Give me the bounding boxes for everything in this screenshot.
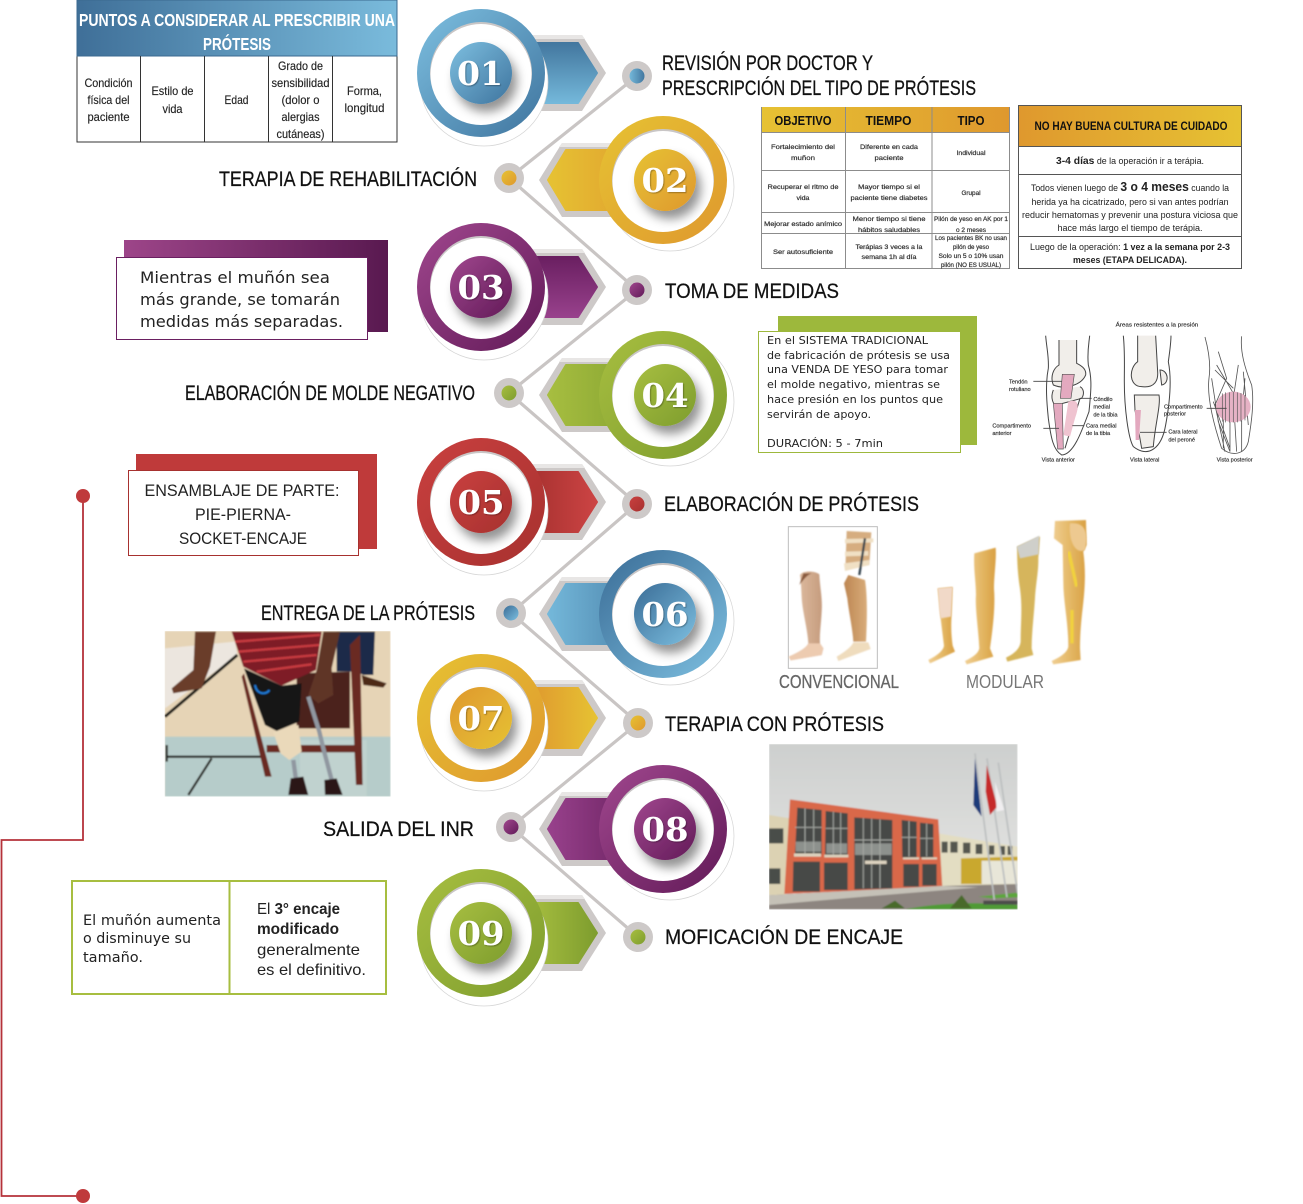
- panel: therapy table: Mayor tiempo si el: [858, 184, 921, 191]
- panel: therapy table: muñon: [791, 155, 815, 162]
- step 08: purple badge: 08: [642, 810, 688, 849]
- right note: El 3° encaje: [257, 901, 340, 918]
- table body: alergias: [282, 110, 320, 124]
- diagram: pressure-tolerant areas of the stump: Cara lateral: [1168, 430, 1198, 436]
- panel: considerations table: [77, 0, 397, 142]
- modular prosthesis 4 socket: [1070, 523, 1086, 551]
- zigzag connector line: [509, 76, 638, 937]
- left note: tamaño.: [83, 950, 143, 966]
- callout: step 04 plaster: de fabricación de prótesis se usa: [767, 349, 950, 362]
- panel: therapy table: pilón de yeso: [953, 244, 989, 251]
- step 03: purple badge: 03: [458, 268, 504, 307]
- heading: salida del inr: SALIDA DEL INR: [323, 818, 474, 841]
- step 07: yellow badge: [417, 654, 606, 791]
- diagram: pressure-tolerant areas of the stump: Compartimento: [1164, 404, 1203, 410]
- panel: therapy table: Diferente en cada: [860, 144, 918, 151]
- step 07: yellow badge: 07: [458, 699, 504, 738]
- table body: Estilo de: [152, 84, 194, 98]
- callout: step 05 assembly: ENSAMBLAJE DE PARTE:: [144, 481, 340, 500]
- table header: PRÓTESIS: [203, 33, 271, 54]
- callout: step 04 plaster: el molde negativo, mientras se: [767, 378, 940, 391]
- diagram: pressure-tolerant areas of the stump: medial: [1093, 404, 1110, 410]
- panel: therapy table: Fortalecimiento del: [771, 144, 836, 151]
- care box header: [1018, 105, 1242, 146]
- callout: step 05 assembly: PIE-PIERNA-: [195, 505, 291, 524]
- panel: therapy table: paciente: [874, 155, 904, 162]
- table body: cutáneas): [276, 127, 324, 141]
- right note: [257, 901, 366, 979]
- anterior view: [1046, 336, 1091, 455]
- lateral view: [1123, 336, 1171, 452]
- right note: modificado: [257, 921, 339, 938]
- heading: revisión por doctor: REVISIÓN POR DOCTOR Y: [662, 52, 873, 75]
- modular prosthesis 4: [1052, 520, 1087, 664]
- callout: step 04 plaster: hace presión en los puntos que: [767, 393, 943, 406]
- table header: [77, 0, 397, 56]
- therapy table header: TIPO: [958, 113, 984, 128]
- heading: revisión por doctor: PRESCRIPCIÓN DEL TIPO DE PRÓTESIS: [662, 77, 976, 100]
- left note: El muñón aumenta: [83, 913, 221, 929]
- panel: care culture box: meses (ETAPA DELICADA).: [1073, 255, 1187, 265]
- therapy table header: TIEMPO: [866, 113, 912, 128]
- step 01: blue badge: 01: [457, 54, 503, 93]
- callout: step 04 plaster: DURACIÓN: 5 - 7min: [767, 437, 883, 450]
- callout: step 03 measures: [116, 240, 388, 340]
- heading: elaboración de prótesis: ELABORACIÓN DE PRÓTESIS: [664, 493, 919, 516]
- heading: elaboración de molde negativo: ELABORACIÓN DE MOLDE NEGATIVO: [185, 382, 475, 405]
- panel: therapy table: Menor tiempo si tiene: [852, 216, 926, 223]
- panel: therapy table: paciente tiene diabetes: [850, 195, 928, 202]
- table body: Grado de: [278, 59, 323, 73]
- panel: care culture box: Todos vienen luego de 3 o 4 meses cuando la: [1031, 180, 1229, 194]
- callout: step 05 assembly: SOCKET-ENCAJE: [179, 529, 307, 548]
- heading: modificación de encaje: MOFICACIÓN DE ENCAJE: [665, 926, 903, 949]
- diagram: pressure-tolerant areas of the stump: Tendón: [1009, 379, 1028, 385]
- step 05: red badge: [417, 438, 606, 575]
- modular prosthesis 2: [965, 548, 996, 664]
- table header: PUNTOS A CONSIDERAR AL PRESCRIBIR UNA: [79, 10, 395, 30]
- callout: step 04 plaster: una VENDA DE YESO para tomar: [767, 363, 948, 376]
- panel: therapy table: Pilón de yeso en AK por 1: [934, 216, 1008, 223]
- care box header: NO HAY BUENA CULTURA DE CUIDADO: [1034, 119, 1228, 133]
- callout: step 04 plaster: servirán de apoyo.: [767, 408, 871, 421]
- connector nodes: [494, 61, 653, 952]
- callout: step 03 measures: medidas más separadas.: [140, 312, 343, 331]
- heading: toma de medidas: TOMA DE MEDIDAS: [665, 280, 839, 303]
- table body: longitud: [344, 101, 384, 115]
- table body: (dolor o: [282, 93, 320, 107]
- diagram: pressure-tolerant areas of the stump: posterior: [1164, 412, 1186, 418]
- heading: entrega de la prótesis: ENTREGA DE LA PRÓTESIS: [261, 602, 475, 625]
- label: modular: MODULAR: [966, 672, 1044, 692]
- panel: care culture box: hace más largo el tiempo de terápia.: [1058, 223, 1202, 233]
- panel: care culture box: herida ya ha cicatrizado, pero si van antes podrían: [1032, 197, 1228, 207]
- step 09: green badge: [417, 869, 606, 1006]
- posterior view: [1205, 336, 1253, 453]
- panel: therapy table: [761, 107, 1010, 269]
- panel: therapy table: o 2 meses: [956, 227, 987, 234]
- panel: care culture box: Luego de la operación: 1 vez a la semana por 2-3: [1030, 242, 1230, 252]
- diagram: pressure-tolerant areas of the stump: de la tibia: [1093, 412, 1118, 418]
- diagram: pressure-tolerant areas of the stump: del peroné: [1168, 438, 1195, 444]
- panel: therapy table: semana 1h al día: [862, 254, 917, 261]
- modular prosthesis 1 socket: [938, 587, 953, 618]
- diagram: pressure-tolerant areas of the stump: Vista lateral: [1130, 458, 1159, 464]
- diagram: pressure-tolerant areas of the stump: rotuliano: [1009, 387, 1031, 393]
- step 06: blue badge: 06: [642, 595, 688, 634]
- panel: therapy table: Solo un 5 o 10% usan: [938, 253, 1004, 260]
- panel: therapy table: vida: [796, 195, 810, 202]
- diagram: pressure-tolerant areas of the stump: de la tibia: [1086, 431, 1111, 437]
- callout: step 04 plaster: [758, 316, 977, 452]
- panel: therapy table: Ser autosuficiente: [773, 249, 833, 256]
- table body: sensibilidad: [272, 76, 330, 90]
- panel: therapy table: Mejorar estado anímico: [764, 221, 842, 228]
- anatomy leader lines: [1033, 381, 1227, 432]
- figure: conventional and modular prostheses: [788, 520, 1087, 668]
- modular prosthesis 3: [1006, 537, 1040, 662]
- table body: [77, 0, 397, 142]
- step 05: red badge: 05: [458, 483, 504, 522]
- diagram: pressure-tolerant areas of the stump: anterior: [992, 431, 1012, 437]
- callout: step 05 assembly: [128, 454, 377, 556]
- modular prosthesis 4 pylon: [1069, 552, 1077, 643]
- callout: step 04 plaster: En el SISTEMA TRADICIONAL: [767, 334, 929, 347]
- decorative red timeline connector: [2, 489, 90, 1203]
- callout: step 03 measures: Mientras el muñón sea: [140, 268, 330, 287]
- conventional prosthesis illustration: [788, 527, 877, 668]
- step 03: purple badge: [417, 223, 606, 360]
- step 08: purple badge: [539, 765, 734, 900]
- therapy table header: [761, 107, 1010, 132]
- step 02: orange badge: [539, 116, 734, 251]
- panel: care culture box: [1018, 105, 1242, 269]
- heading: terapia con prótesis: TERAPIA CON PRÓTESIS: [665, 713, 884, 736]
- diagram: pressure-tolerant areas of the stump: Vista posterior: [1217, 458, 1253, 464]
- table body: Edad: [224, 93, 248, 107]
- panel: therapy table: Individual: [956, 150, 986, 157]
- heading: terapia de rehabilitación: TERAPIA DE REHABILITACIÓN: [219, 168, 477, 191]
- heading: revisión por doctor: [662, 52, 976, 100]
- modular prosthesis 1: [928, 587, 955, 663]
- table body: vida: [162, 102, 183, 116]
- panel: therapy table: Los pacientes BK no usan: [935, 235, 1007, 242]
- table body: Forma,: [347, 84, 382, 98]
- photo: INR building: [769, 744, 1018, 910]
- callout: step 03 measures: más grande, se tomarán: [140, 290, 340, 309]
- panel: care culture box: reducir hematomas y prevenir una postura viciosa que: [1022, 210, 1238, 220]
- panel: therapy table: Terápias 3 veces a la: [856, 244, 923, 251]
- diagram: pressure-tolerant areas of the stump: Cara medial: [1086, 424, 1116, 430]
- table body: física del: [88, 93, 130, 107]
- label: conventional: CONVENCIONAL: [779, 672, 899, 692]
- therapy table header: OBJETIVO: [774, 113, 832, 128]
- diagram: pressure-tolerant areas of the stump: [992, 322, 1253, 464]
- step 09: green badge: 09: [458, 914, 504, 953]
- diagram: pressure-tolerant areas of the stump: Áreas resistentes a la presión: [1116, 322, 1198, 329]
- callout: step 09 stump change: [72, 881, 386, 994]
- step 04: green badge: [539, 331, 734, 466]
- diagram: pressure-tolerant areas of the stump: Compartimento: [992, 424, 1031, 430]
- panel: therapy table: Recuperar el ritmo de: [768, 184, 839, 191]
- step 06: blue badge: [539, 550, 734, 685]
- step 04: green badge: 04: [642, 376, 688, 415]
- panel: care culture box: 3-4 días de la operación ir a terápia.: [1056, 155, 1204, 167]
- modular prosthesis 3 socket: [1017, 536, 1039, 558]
- table body: paciente: [88, 110, 130, 124]
- diagram: pressure-tolerant areas of the stump: Cóndilo: [1093, 397, 1113, 403]
- panel: therapy table: pilón (NO ES USUAL): [941, 262, 1001, 269]
- left note: o disminuye su: [83, 931, 191, 947]
- step 01: blue badge: [417, 9, 606, 146]
- right note: es el definitivo.: [257, 962, 366, 979]
- step 02: orange badge: 02: [642, 161, 688, 200]
- left note: [83, 913, 221, 966]
- diagram: pressure-tolerant areas of the stump: Vista anterior: [1042, 458, 1075, 464]
- right note: generalmente: [257, 942, 360, 959]
- table body: Condición: [84, 76, 132, 90]
- panel: therapy table: hábitos saludables: [858, 227, 921, 234]
- panel: therapy table: Grupal: [962, 190, 981, 197]
- photo: patient with prosthesis: [165, 631, 391, 797]
